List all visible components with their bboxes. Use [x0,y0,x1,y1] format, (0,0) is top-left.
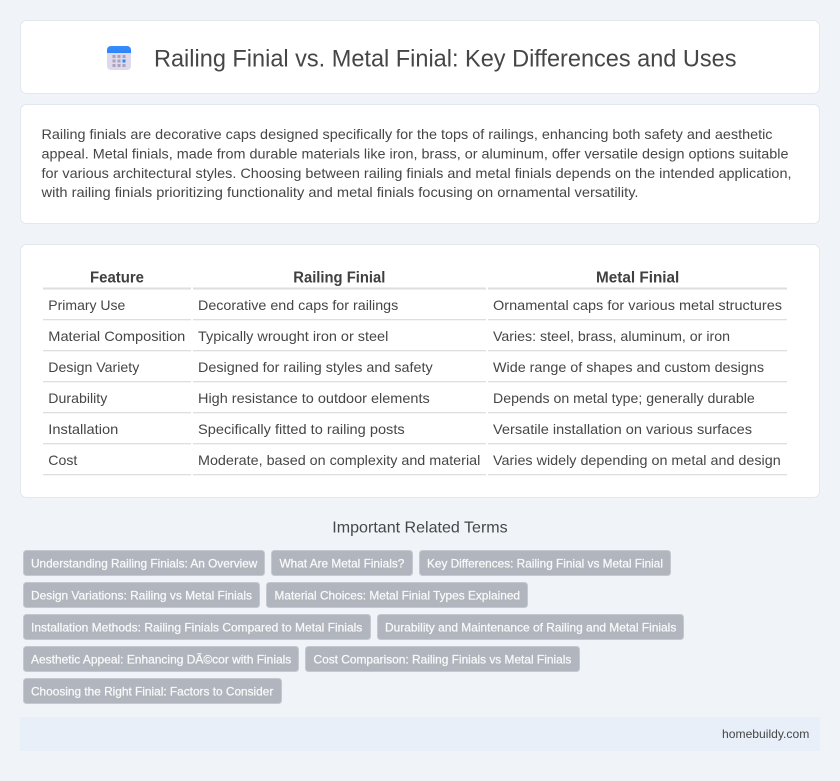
title: Railing Finial vs. Metal Finial: Key Differences and Uses [154,46,736,72]
text block: introduction paragraph: for various architectural styles. Choosing between railing finials and metal finials depends on the intended application, [42,165,791,181]
tag: what are metal finials: What Are Metal Finials? [280,556,405,570]
table row: installation: Installation [48,421,118,437]
tag: design variations: Design Variations: Railing vs Metal Finials [31,588,252,602]
table row: cost: Moderate, based on complexity and material [198,452,480,468]
text block: introduction paragraph: with railing finials prioritizing functionality and metal finials focusing on ornamental versatility. [40,184,639,200]
table row: primary use [43,297,787,320]
tag: material choices [266,582,528,608]
table row: cost [43,452,787,475]
table row: durability: Depends on metal type; generally durable [493,390,755,406]
table header row: Railing Finial [293,270,385,286]
table header row [43,270,787,290]
footer [20,717,820,751]
tag: understanding railing finials: Understanding Railing Finials: An Overview [31,556,258,570]
tag: material choices: Material Choices: Metal Finial Types Explained [274,588,520,602]
panel: introduction [20,104,820,224]
text block: introduction paragraph [40,126,791,200]
table row: material composition [43,328,787,351]
tag: aesthetic appeal: Aesthetic Appeal: Enhancing DÃ©cor with Finials [31,652,291,666]
table row: material composition: Material Composition [48,328,185,344]
table row: durability [43,390,787,413]
panel: comparison table [20,244,820,498]
table row: material composition: Typically wrought iron or steel [198,328,388,344]
tag: durability and maintenance [378,614,684,640]
tag: choosing the right finial: Choosing the Right Finial: Factors to Consider [31,684,273,698]
tag: aesthetic appeal [24,646,298,672]
footer: homebuildy.com [722,727,809,741]
icon: calendar [107,46,131,70]
panel: header [20,20,820,94]
table row: design variety: Design Variety [48,359,139,375]
table row: durability: High resistance to outdoor elements [198,390,430,406]
table row: primary use: Primary Use [48,297,126,313]
tag: design variations [24,582,260,608]
table row: cost: Cost [48,452,77,468]
table row: design variety [43,359,787,382]
tag: key differences: Key Differences: Railing Finial vs Metal Finial [427,556,663,570]
heading: important related terms: Important Related Terms [332,520,508,537]
table row: installation: Specifically fitted to railing posts [198,421,405,437]
panel: related term tags [24,550,684,704]
tag: understanding railing finials [24,550,264,576]
tag: key differences [420,550,670,576]
table row: installation: Versatile installation on various surfaces [493,421,752,437]
tag: installation methods [24,614,370,640]
text block: introduction paragraph: appeal. Metal finials, made from durable materials like iron, brass, or aluminum, offer versatile design options suitable [42,146,789,162]
table header row: Feature [90,270,144,286]
table row: cost: Varies widely depending on metal and design [493,452,781,468]
table header row: Metal Finial [596,270,679,286]
table row: primary use: Ornamental caps for various metal structures [493,297,782,313]
table row: design variety: Wide range of shapes and custom designs [493,359,764,375]
table row: material composition: Varies: steel, brass, aluminum, or iron [493,328,730,344]
table row: design variety: Designed for railing styles and safety [198,359,433,375]
tag: what are metal finials [272,550,412,576]
table row: durability: Durability [48,390,107,406]
table row: primary use: Decorative end caps for railings [198,297,398,313]
table row: installation [43,421,787,444]
text block: introduction paragraph: Railing finials are decorative caps designed specifically for the tops of railings, enhancing both safety and aesthetic [42,126,772,142]
tag: choosing the right finial [24,678,282,704]
tag: cost comparison: Cost Comparison: Railing Finials vs Metal Finials [314,652,571,666]
tag: cost comparison [306,646,580,672]
tag: durability and maintenance: Durability and Maintenance of Railing and Metal Finials [385,620,676,634]
tag: installation methods: Installation Methods: Railing Finials Compared to Metal Finials [31,620,362,634]
